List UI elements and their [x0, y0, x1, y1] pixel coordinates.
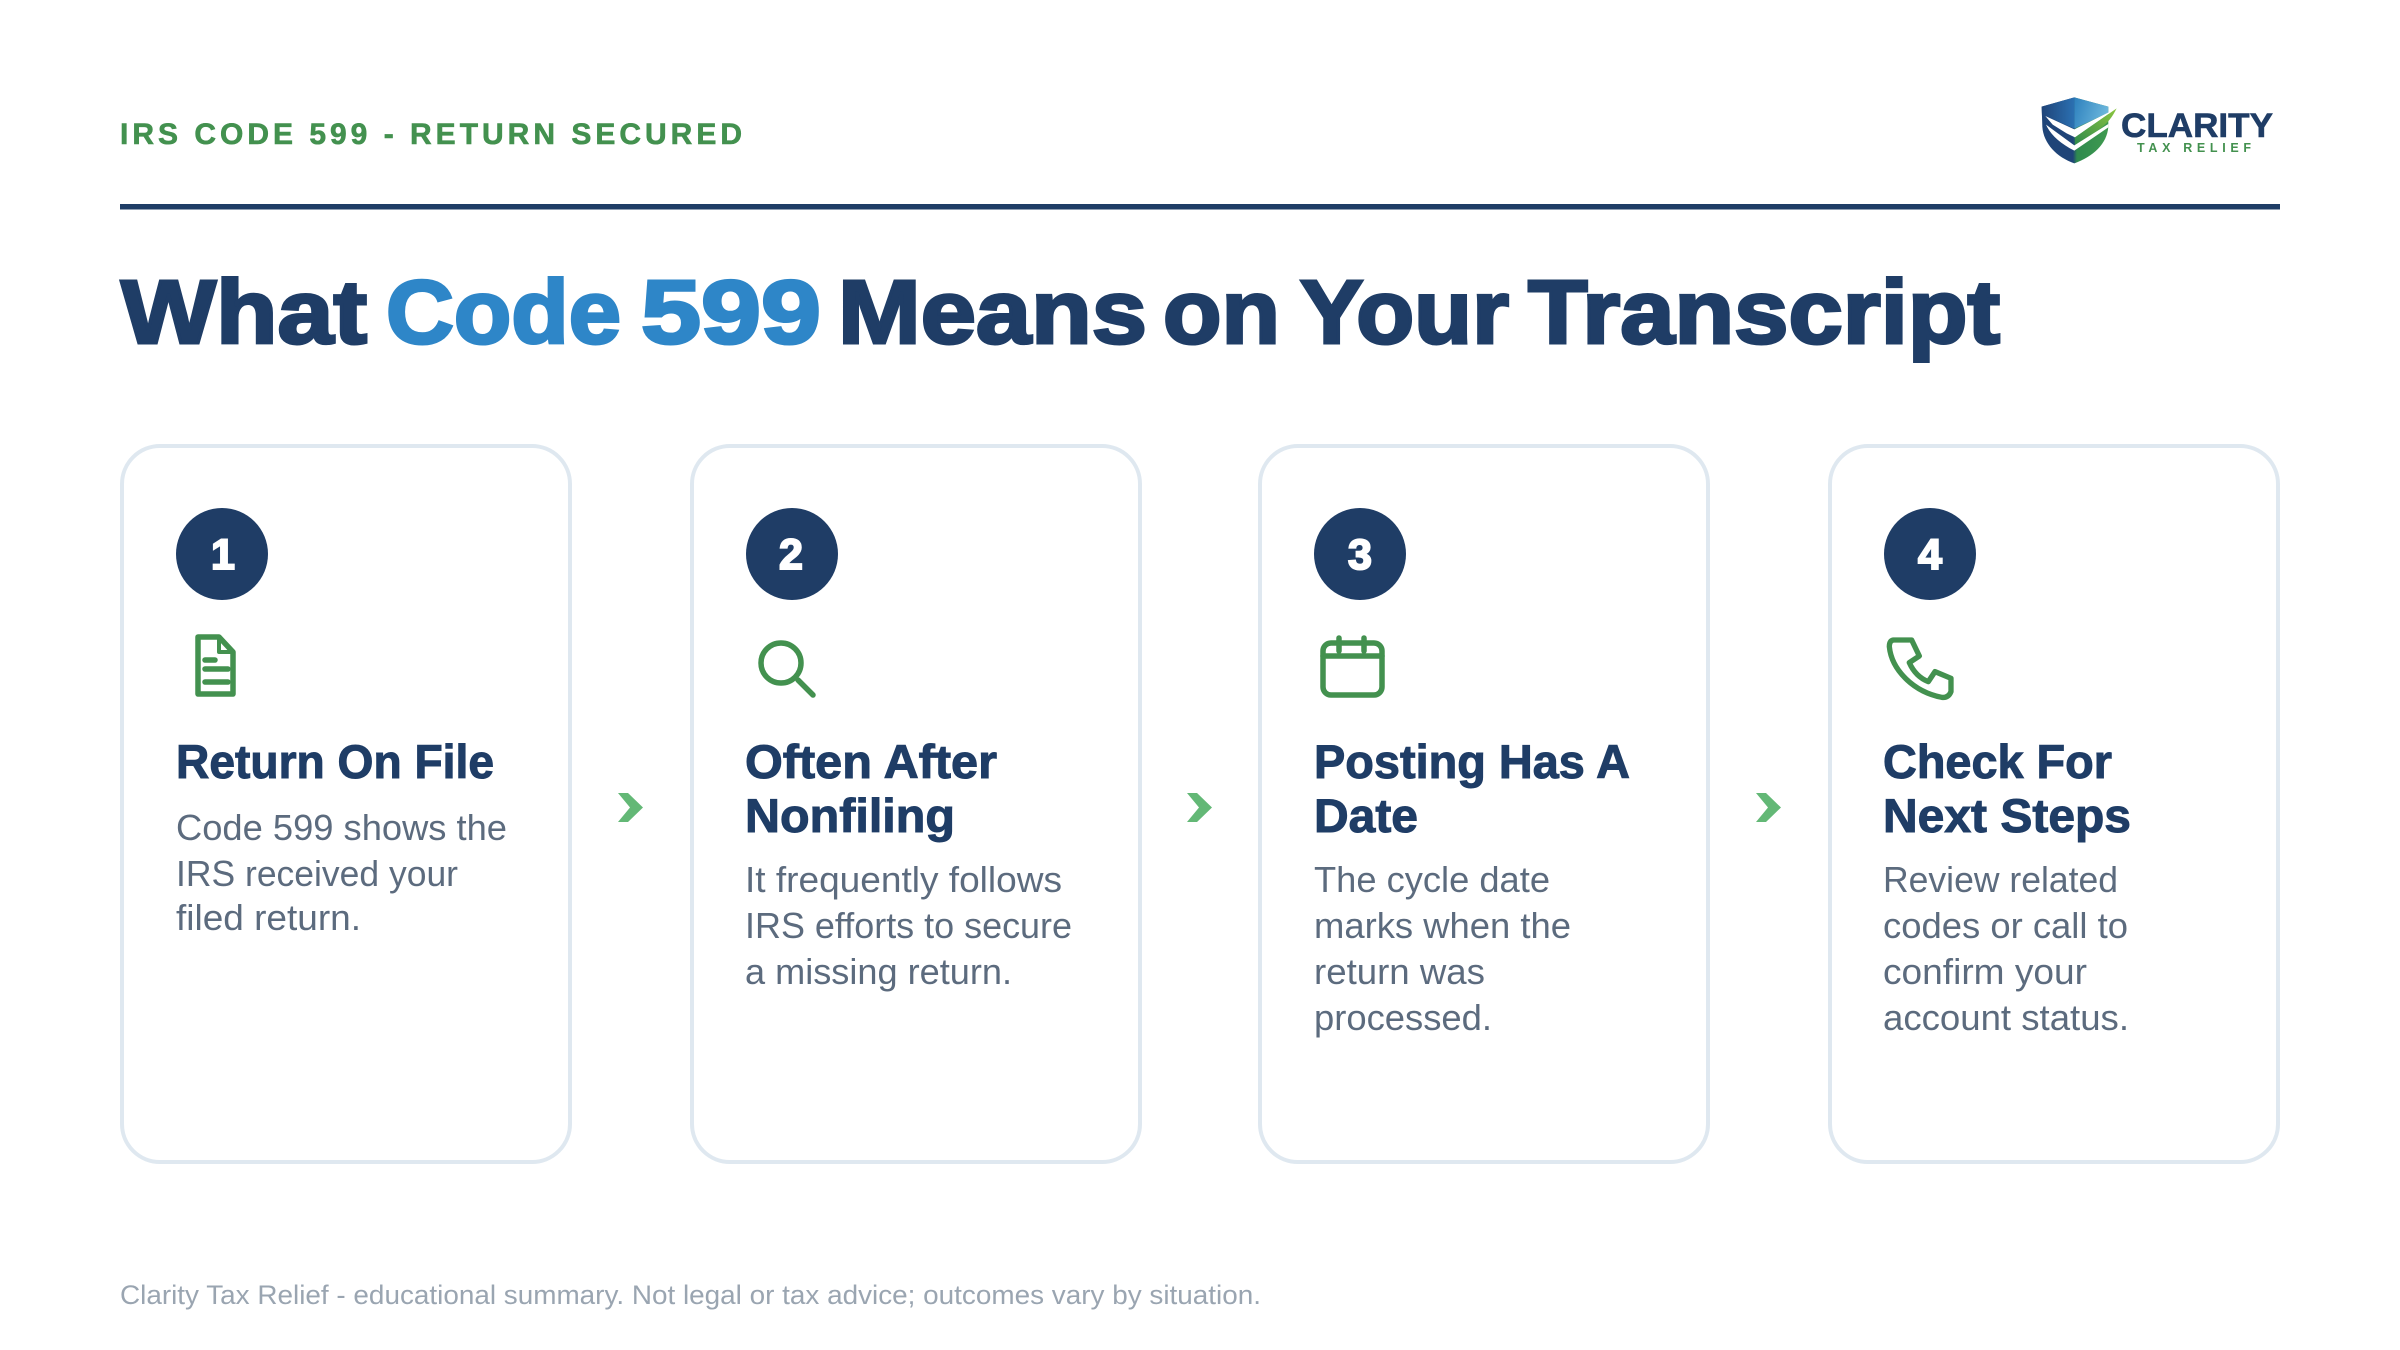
- step 4 body: confirm your: [1883, 951, 2087, 992]
- card outline: [122, 446, 570, 1162]
- title: Your: [1300, 263, 1509, 363]
- card outline: [1260, 446, 1708, 1162]
- card outline: [1830, 446, 2278, 1162]
- step 4 heading: [1883, 735, 2131, 842]
- arrow 1 to 2: [618, 793, 643, 822]
- step 4 body: Review related: [1883, 859, 2118, 900]
- icon: phone: [1889, 640, 1951, 697]
- step 4 body: account status.: [1883, 997, 2129, 1038]
- number badge 2: 2: [779, 531, 803, 579]
- number badge 1: 1: [211, 531, 235, 579]
- panel: step 3 Posting Has A Date: [1260, 446, 1708, 1162]
- step 4 heading: Next Steps: [1883, 789, 2131, 842]
- title: on: [1163, 263, 1280, 363]
- step 4 body: [1883, 859, 2129, 1038]
- step 1 heading: Return On File: [176, 735, 494, 788]
- footer disclaimer: Clarity Tax Relief - educational summary. Not legal or tax advice; outcomes vary by situation.: [120, 1280, 1261, 1310]
- header rule: [120, 204, 2280, 210]
- step 3 body: [1314, 859, 1571, 1038]
- panel: step 4 Check For Next Steps: [1830, 446, 2278, 1162]
- logo shield: [2042, 97, 2117, 163]
- card outline: [692, 446, 1140, 1162]
- icon: document: [198, 637, 233, 694]
- title: Transcript: [1528, 263, 2000, 363]
- step 2 heading: Often After: [745, 735, 997, 788]
- step 4 body: codes or call to: [1883, 905, 2128, 946]
- arrow 3 to 4: [1756, 793, 1781, 822]
- step 3 body: marks when the: [1314, 905, 1571, 946]
- number badge 4: 4: [1918, 531, 1942, 579]
- step 2 heading: Nonfiling: [745, 789, 955, 842]
- number badge 2: [746, 508, 838, 600]
- arrow 2 to 3: [1187, 793, 1212, 822]
- icon: calendar: [1323, 638, 1382, 695]
- logo wordmark: CLARITY: [2121, 107, 2273, 145]
- panel: step 1 Return On File: [122, 446, 570, 1162]
- step 3 heading: [1314, 735, 1630, 842]
- number badge 3: [1314, 508, 1406, 600]
- eyebrow heading: IRS CODE 599 - RETURN SECURED: [120, 118, 742, 151]
- logo tagline: TAX RELIEF: [2137, 141, 2251, 155]
- step 3 body: return was: [1314, 951, 1485, 992]
- step 2 body: [745, 859, 1072, 992]
- step 3 heading: Date: [1314, 789, 1418, 842]
- step 2 body: IRS efforts to secure: [745, 905, 1072, 946]
- step 2 body: It frequently follows: [745, 859, 1062, 900]
- step 2 heading: [745, 735, 997, 842]
- step 1 body: IRS received your: [176, 853, 458, 894]
- step 4 heading: Check For: [1883, 735, 2112, 788]
- number badge 3: 3: [1348, 531, 1372, 579]
- logo: Clarity Tax Relief: [2042, 97, 2273, 163]
- step 3 body: processed.: [1314, 997, 1492, 1038]
- title: Code: [386, 263, 621, 363]
- number badge 1: [176, 508, 268, 600]
- title: 599: [641, 263, 821, 363]
- panel: step 2 Often After Nonfiling: [692, 446, 1140, 1162]
- step 3 body: The cycle date: [1314, 859, 1550, 900]
- title: What: [121, 263, 367, 363]
- icon: magnifier: [761, 643, 813, 695]
- number badge 4: [1884, 508, 1976, 600]
- step 1 body: Code 599 shows the: [176, 807, 507, 848]
- step 3 heading: Posting Has A: [1314, 735, 1630, 788]
- title: Means: [838, 263, 1147, 363]
- step 1 body: filed return.: [176, 897, 361, 938]
- step 1 body: [176, 807, 507, 938]
- step 2 body: a missing return.: [745, 951, 1012, 992]
